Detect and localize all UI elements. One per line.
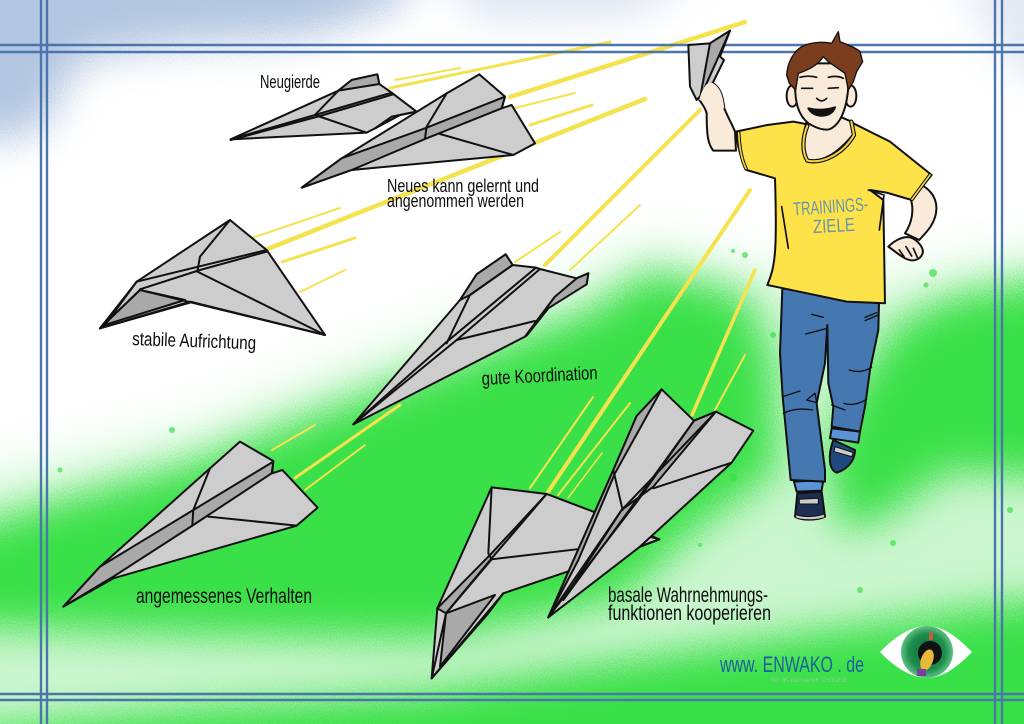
boy: upper body: [688, 31, 936, 303]
label: basale Wahrnehmungsfunktionen kooperieren: funktionen kooperieren: [608, 602, 771, 625]
right shoe: [830, 440, 855, 473]
label: gute Koordination: gute Koordination: [481, 363, 598, 390]
logo: eye with figure: [880, 626, 972, 678]
paper plane: basale Wahrnehmungsfunktionen: [548, 389, 753, 617]
left shoe: [795, 492, 825, 520]
sleeve hems: [739, 133, 930, 199]
label: stabile Aufrichtung: stabile Aufrichtung: [132, 329, 256, 354]
copyright note: © Künast 2022: [771, 677, 848, 684]
label: Neugierde: Neugierde: [260, 72, 320, 92]
jeans: [780, 288, 879, 482]
hair: [787, 32, 863, 90]
website link: www. ENWAKO . de: [719, 652, 864, 677]
right arm: [905, 184, 936, 240]
held paper plane: [688, 31, 730, 108]
collar: [803, 122, 854, 161]
background: blue spray top: [0, 0, 1024, 167]
label: basale Wahrnehmungsfunktionen kooperieren: basale Wahrnehmungs-: [608, 584, 768, 607]
cuffs: [794, 480, 823, 492]
shirt folds: [782, 190, 884, 248]
label: Neues kann gelernt und angenommen werden: Neues kann gelernt und: [387, 176, 539, 196]
boy: legs and shoes: [780, 288, 879, 520]
background: green spray: [0, 236, 1024, 724]
mouth: [808, 107, 835, 116]
paper plane: angemessenes Verhalten: [63, 442, 318, 607]
neck: [803, 117, 854, 161]
right hand: [888, 237, 923, 260]
paper plane: gute Koordination: [353, 254, 588, 424]
raised arm: [699, 83, 736, 151]
shirt lettering: TRAININGS-: [792, 194, 869, 221]
paper plane: Neugierde: [231, 74, 417, 140]
paper plane: rear plane of pair: [432, 487, 659, 678]
background: pale green spray haze: [0, 218, 1024, 724]
label: Neues kann gelernt und angenommen werden: angenommen werden: [387, 191, 524, 211]
spray droplets: [58, 249, 1013, 593]
t-shirt: [736, 122, 932, 303]
paper plane: stabile Aufrichtung: [100, 220, 325, 335]
shirt lettering second line: ZIELE: [812, 215, 855, 238]
face: [795, 63, 848, 130]
eyes and brows: [800, 76, 843, 101]
yellow speed streaks: [252, 22, 755, 498]
label: angemessenes Verhalten: angemessenes Verhalten: [136, 585, 312, 608]
ears: [787, 85, 798, 107]
paper plane: Neues kann gelernt: [302, 74, 535, 188]
